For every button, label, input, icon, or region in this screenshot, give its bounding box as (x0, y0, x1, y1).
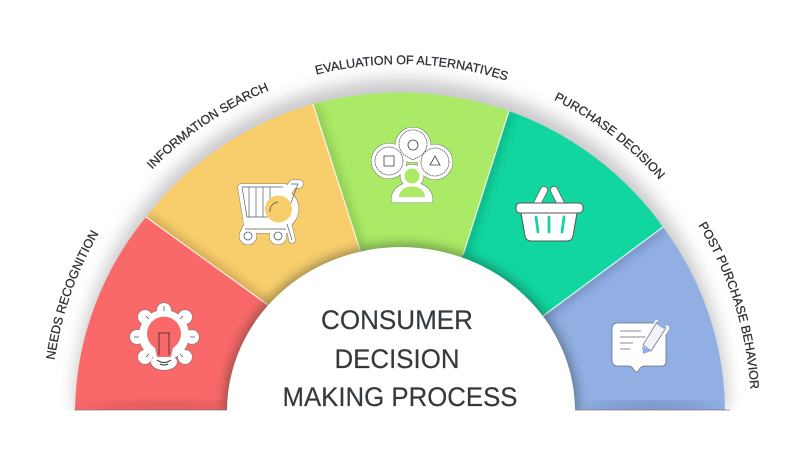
label: purchase decision: PURCHASE DECISION (554, 92, 666, 180)
panel: needs recognition segment (75, 217, 268, 410)
title (282, 305, 518, 412)
icon: shopping cart (240, 184, 299, 244)
label: needs recognition: NEEDS RECOGNITION (46, 230, 98, 360)
center white semicircle (227, 247, 575, 411)
title: MAKING PROCESS (282, 382, 518, 412)
icon: light bulb gear (130, 303, 199, 370)
panel: evaluation of alternatives segment (313, 92, 509, 258)
title: DECISION (334, 344, 460, 374)
icon: shopping basket (516, 190, 583, 241)
label: post purchase behavior: POST PURCHASE BEHAVIOR (698, 221, 759, 389)
panel: purchase decision segment (462, 111, 663, 316)
title: CONSUMER (321, 305, 473, 335)
label: information search: INFORMATION SEARCH (146, 82, 268, 169)
icon: note and pencil (612, 319, 667, 372)
panel: information search segment (146, 104, 360, 306)
icon: options and person (374, 130, 450, 200)
outer halo shadow (74, 79, 728, 410)
semicircular chart (74, 93, 730, 410)
inner arc shadow (223, 243, 579, 411)
panel: post purchase behavior segment (543, 227, 725, 410)
label: evaluation of alternatives: EVALUATION OF ALTERNATIVES (315, 55, 508, 80)
